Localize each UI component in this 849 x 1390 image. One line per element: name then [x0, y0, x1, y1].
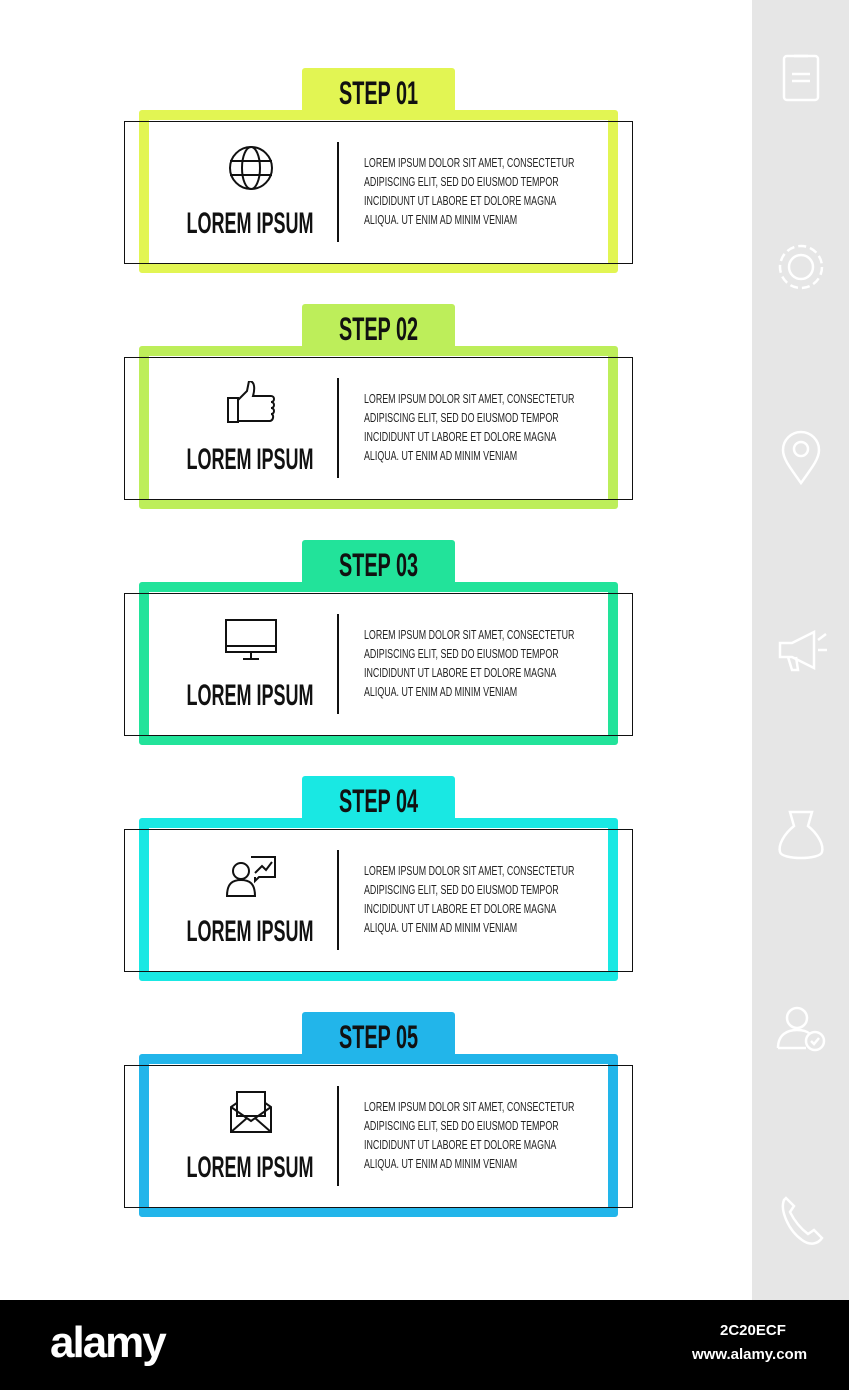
step 5: LOREM IPSUM DOLOR SIT AMET, CONSECTETUR — [364, 1100, 574, 1114]
step 4: LOREM IPSUM DOLOR SIT AMET, CONSECTETUR — [364, 864, 574, 878]
step 1: STEP 01 — [339, 75, 418, 111]
footer bar: www.alamy.com — [692, 1346, 807, 1363]
step 1: ADIPISCING ELIT, SED DO EIUSMOD TEMPOR — [364, 175, 559, 189]
icon: user check — [778, 1008, 824, 1050]
step 5 — [124, 1012, 633, 1217]
step 2: ADIPISCING ELIT, SED DO EIUSMOD TEMPOR — [364, 411, 559, 425]
sidebar — [752, 0, 849, 1300]
step 5: LOREM IPSUM — [186, 1151, 313, 1184]
step 2: LOREM IPSUM DOLOR SIT AMET, CONSECTETUR — [364, 392, 574, 406]
icon: pin — [783, 432, 819, 483]
step 5: INCIDIDUNT UT LABORE ET DOLORE MAGNA — [364, 1138, 556, 1152]
step 1: LOREM IPSUM — [186, 207, 313, 240]
icon: thumbs up — [227, 381, 275, 423]
step 5: STEP 05 — [339, 1019, 418, 1055]
icon: megaphone — [780, 632, 827, 670]
step 2: LOREM IPSUM — [186, 443, 313, 476]
icon: clipboard — [784, 56, 818, 100]
footer bar: alamy — [50, 1318, 165, 1367]
step 3: LOREM IPSUM — [186, 679, 313, 712]
step 3: INCIDIDUNT UT LABORE ET DOLORE MAGNA — [364, 666, 556, 680]
step 3: STEP 03 — [339, 547, 418, 583]
step 1 — [124, 68, 633, 273]
step 5: ADIPISCING ELIT, SED DO EIUSMOD TEMPOR — [364, 1119, 559, 1133]
step 2 — [124, 304, 633, 509]
step 4: STEP 04 — [339, 783, 418, 819]
step 2: ALIQUA. UT ENIM AD MINIM VENIAM — [364, 449, 517, 463]
icon: monitor — [225, 619, 277, 660]
icon: envelope — [230, 1091, 272, 1133]
step 4: LOREM IPSUM — [186, 915, 313, 948]
step 4 — [124, 776, 633, 981]
footer bar — [0, 1300, 849, 1390]
step 2: INCIDIDUNT UT LABORE ET DOLORE MAGNA — [364, 430, 556, 444]
step 4: INCIDIDUNT UT LABORE ET DOLORE MAGNA — [364, 902, 556, 916]
step 4: ADIPISCING ELIT, SED DO EIUSMOD TEMPOR — [364, 883, 559, 897]
footer bar: 2C20ECF — [720, 1322, 786, 1339]
step 3: ADIPISCING ELIT, SED DO EIUSMOD TEMPOR — [364, 647, 559, 661]
icon: bag — [780, 812, 822, 858]
icon: globe — [229, 146, 273, 190]
step 3: LOREM IPSUM DOLOR SIT AMET, CONSECTETUR — [364, 628, 574, 642]
step 1: ALIQUA. UT ENIM AD MINIM VENIAM — [364, 213, 517, 227]
step 3: ALIQUA. UT ENIM AD MINIM VENIAM — [364, 685, 517, 699]
step 5: ALIQUA. UT ENIM AD MINIM VENIAM — [364, 1157, 517, 1171]
step 2: STEP 02 — [339, 311, 418, 347]
step 3 — [124, 540, 633, 745]
icon: phone — [783, 1198, 822, 1244]
step 1: LOREM IPSUM DOLOR SIT AMET, CONSECTETUR — [364, 156, 574, 170]
step 1: INCIDIDUNT UT LABORE ET DOLORE MAGNA — [364, 194, 556, 208]
icon: gear — [780, 246, 822, 288]
icon: presenter — [226, 856, 276, 897]
step 4: ALIQUA. UT ENIM AD MINIM VENIAM — [364, 921, 517, 935]
